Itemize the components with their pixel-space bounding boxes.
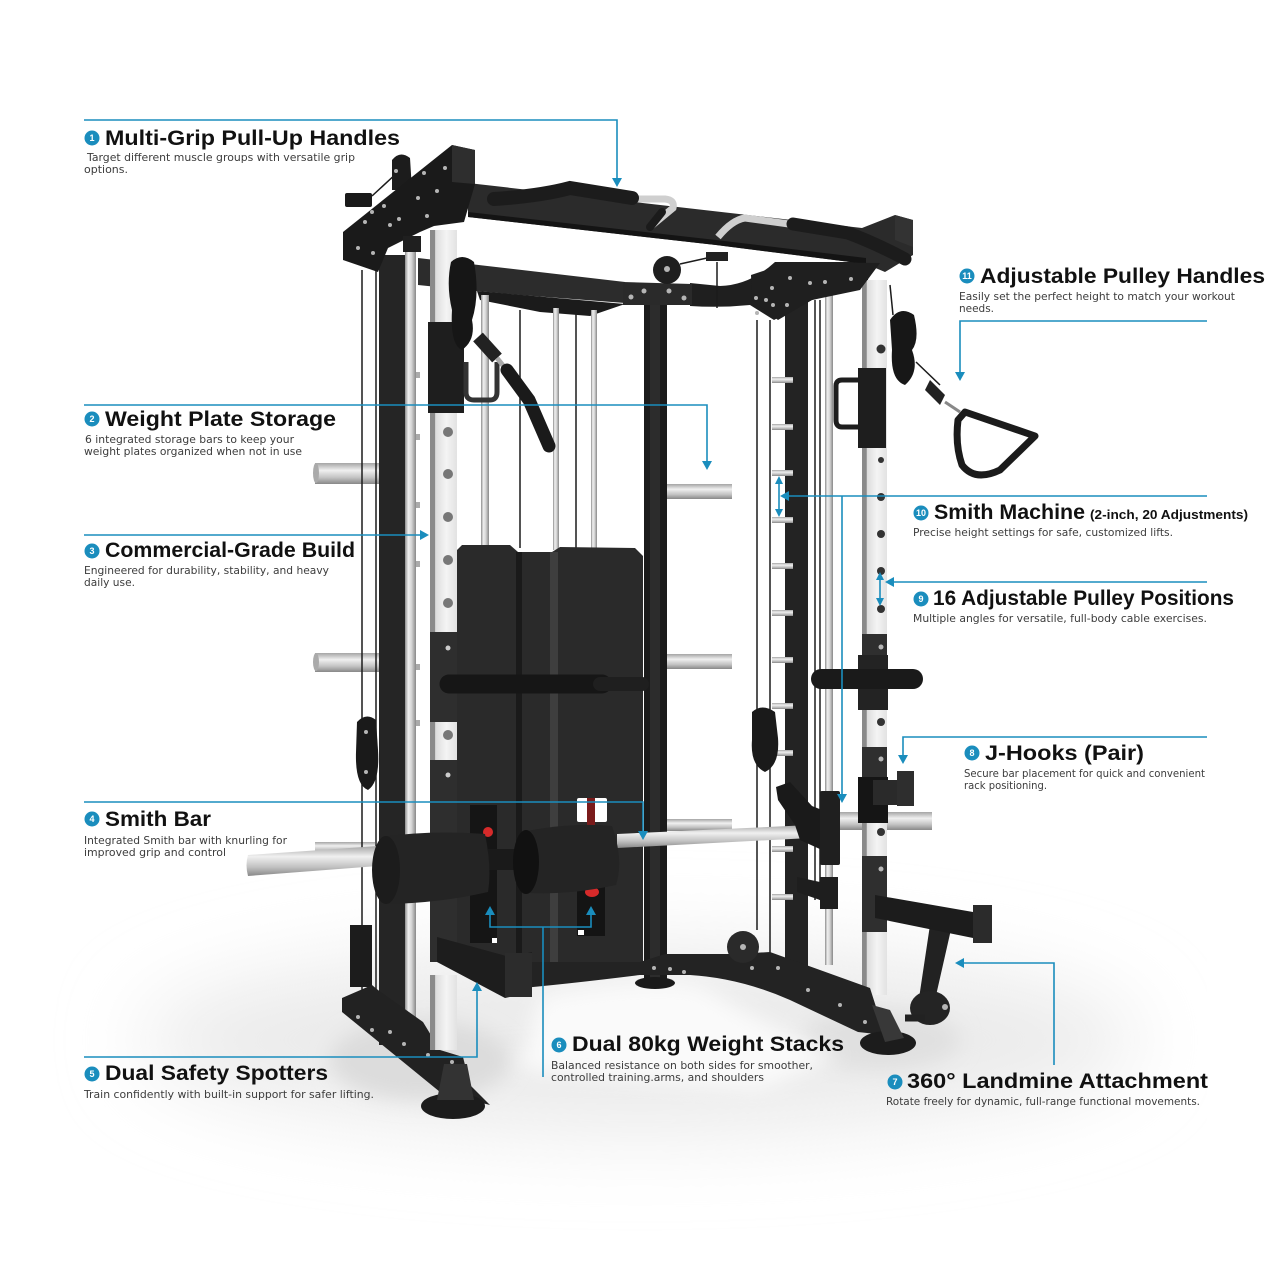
callout 3: Commercial-Grade Build: Commercial-Grade Build	[105, 539, 355, 562]
callout 9: 16 Adjustable Pulley Positions: 16 Adjustable Pulley Positions	[933, 587, 1234, 610]
right lower pulleys	[752, 708, 778, 772]
callout 11: Adjustable Pulley Handles: Easily set the perfect height to match your workout	[959, 291, 1235, 303]
Smith bar and pads	[246, 825, 810, 904]
callout 2: Weight Plate Storage	[84, 405, 712, 470]
callout 1: Multi-Grip Pull-Up Handles	[84, 120, 622, 187]
callout 11: Adjustable Pulley Handles	[955, 265, 1265, 381]
gym machine illustration	[246, 145, 1035, 1119]
rear centre column	[623, 252, 728, 980]
right silver upright	[862, 280, 887, 995]
callout 7: 360 Landmine Attachment: 360° Landmine Attachment	[907, 1070, 1208, 1093]
callout 5: Dual Safety Spotters	[83, 982, 482, 1101]
callout 8: J-Hooks: rack positioning.	[964, 780, 1047, 792]
callout 6: Dual 80kg Weight Stacks: Dual 80kg Weight Stacks	[572, 1033, 844, 1056]
callout 2: Weight Plate Storage: weight plates organized when not in use	[84, 446, 302, 458]
callout 2: Weight Plate Storage: 6 integrated storage bars to keep your	[85, 434, 295, 446]
dip handle front	[449, 674, 642, 694]
callout 8: J-Hooks	[898, 737, 1207, 792]
callout 5: Dual Safety Spotters: Train confidently with built-in support for safer lifting.	[83, 1089, 374, 1101]
callout 3: Commercial-Grade Build: 3	[89, 546, 95, 556]
callout 9: 16 Adjustable Pulley Positions	[876, 572, 1234, 625]
callout 1: Multi-Grip Pull-Up Handles: 1	[89, 133, 95, 143]
callout 4: Smith Bar: Smith Bar	[105, 808, 211, 831]
callout 6: Dual 80kg Weight Stacks: controlled training.arms, and shoulders	[551, 1072, 764, 1084]
callout 6: Dual 80kg Weight Stacks: Balanced resistance on both sides for smoother,	[551, 1060, 813, 1072]
landmine attachment and right spotter	[875, 895, 992, 1025]
callout 3: Commercial-Grade Build: Engineered for durability, stability, and heavy	[84, 565, 329, 577]
callout 4: Smith Bar	[84, 802, 648, 859]
callout 7: 360 Landmine Attachment: Rotate freely for dynamic, full-range functional movements.	[886, 1096, 1200, 1108]
callout 8: J-Hooks: Secure bar placement for quick and convenient	[964, 768, 1205, 780]
callout 6: Dual 80kg Weight Stacks: 6	[556, 1040, 562, 1050]
callout 4: Smith Bar: 4	[89, 814, 95, 824]
callout 11: Adjustable Pulley Handles: 11	[962, 271, 972, 281]
callout 9: 16 Adjustable Pulley Positions: 9	[918, 594, 924, 604]
right spotter handle	[811, 655, 923, 710]
top left gusset plate and pulley	[343, 145, 475, 272]
callout 10: Smith Machine	[775, 476, 1248, 803]
callout 8: J-Hooks: 8	[969, 748, 975, 758]
callout 1: Multi-Grip Pull-Up Handles: options.	[84, 164, 128, 176]
callout 2: Weight Plate Storage: Weight Plate Storage	[105, 408, 336, 431]
callout 9: 16 Adjustable Pulley Positions: Multiple angles for versatile, full-body cable exercises.	[913, 613, 1207, 625]
right pulley and D-handle	[836, 285, 1035, 475]
left pulley and rope handle	[428, 257, 549, 446]
base frame	[342, 931, 916, 1119]
weight stack shroud	[457, 545, 643, 968]
stack windows	[470, 798, 607, 943]
callout 11: Adjustable Pulley Handles: needs.	[959, 303, 994, 315]
callout 2: Weight Plate Storage: 2	[89, 414, 95, 424]
callout 4: Smith Bar: improved grip and control	[84, 847, 226, 859]
callout 3: Commercial-Grade Build	[84, 530, 429, 589]
callout 1: Multi-Grip Pull-Up Handles: Multi-Grip Pull-Up Handles	[105, 127, 400, 150]
top right gusset plate	[751, 215, 913, 320]
callout 8: J-Hooks: J-Hooks (Pair)	[985, 742, 1144, 765]
callout 3: Commercial-Grade Build: daily use.	[84, 577, 135, 589]
plate storage bars	[313, 463, 932, 853]
Smith carriage	[776, 782, 840, 909]
rear crossbeam	[418, 258, 868, 320]
callout 6: Dual 80kg Weight Stacks	[485, 906, 844, 1084]
callout 10: Smith Machine: Smith Machine	[934, 501, 1085, 524]
callout 4: Smith Bar: Integrated Smith bar with knurling for	[84, 835, 288, 847]
callout 5: Dual Safety Spotters: 5	[89, 1069, 95, 1079]
callout 10: Smith Machine: 10	[916, 508, 926, 518]
J-hook	[858, 771, 914, 823]
callout 11: Adjustable Pulley Handles: Adjustable Pulley Handles	[980, 265, 1265, 288]
right inner post with weight pegs	[772, 285, 833, 975]
callout 10: Smith Machine: (2-inch, 20 Adjustments)	[1090, 507, 1248, 522]
callout 7: 360 Landmine Attachment: 7	[892, 1077, 898, 1087]
callout 7: 360 Landmine Attachment	[886, 958, 1208, 1108]
callout 5: Dual Safety Spotters: Dual Safety Spotters	[105, 1062, 328, 1085]
left safety spotter	[437, 937, 532, 998]
guide rods and cables at the rear	[362, 270, 820, 1000]
callout 10: Smith Machine: Precise height settings for safe, customized lifts.	[913, 527, 1173, 539]
left lower pulleys	[350, 716, 378, 987]
left post and chrome rod	[379, 252, 420, 1045]
top frame with multi-grip handles	[468, 183, 913, 272]
callout 1: Multi-Grip Pull-Up Handles: Target different muscle groups with versatile grip	[86, 152, 355, 164]
left silver upright	[430, 230, 457, 962]
